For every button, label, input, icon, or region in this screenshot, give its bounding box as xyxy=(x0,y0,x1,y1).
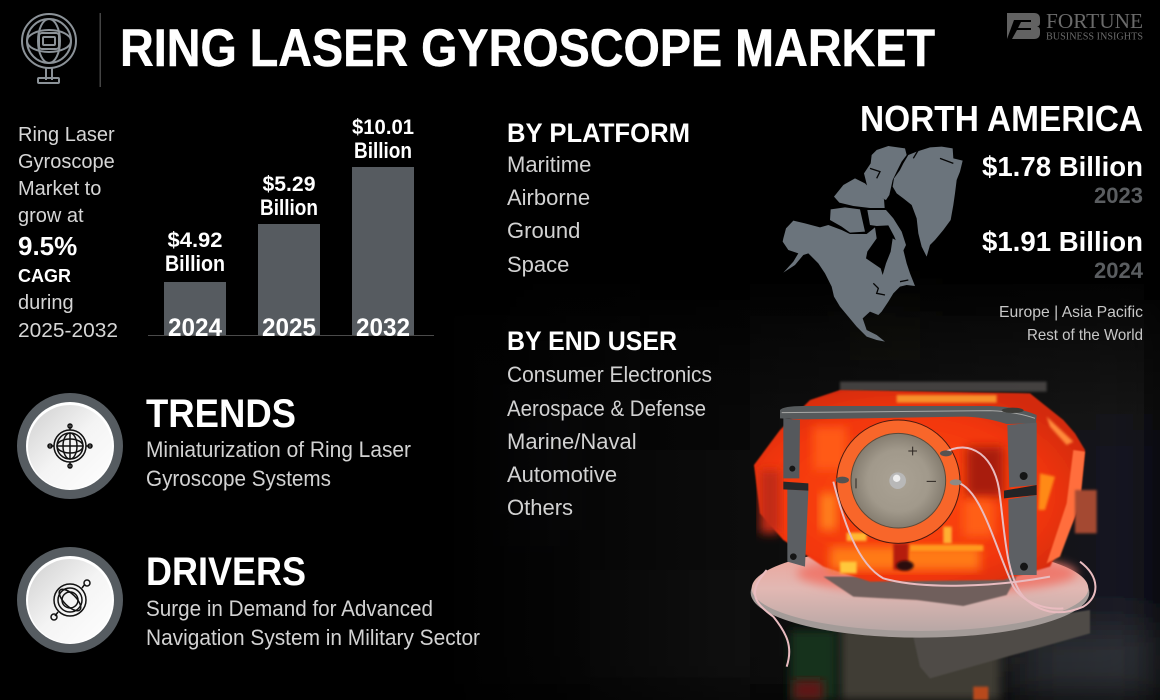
bar chart xyxy=(148,116,434,342)
trends text: Miniaturization of Ring Laser xyxy=(146,437,411,462)
photo: ring laser gyroscope device xyxy=(751,382,1097,700)
bar 2025 xyxy=(258,173,320,342)
bar 2024: $4.92 xyxy=(168,229,222,252)
bar 2024 xyxy=(164,229,226,342)
CAGR text block: 9.5% xyxy=(18,231,77,261)
bar 2025: Billion xyxy=(260,195,318,220)
map: North America xyxy=(783,146,963,342)
segment list: by end user: Automotive xyxy=(507,462,617,487)
CAGR text block: during xyxy=(18,292,74,314)
bar 2025: 2025 xyxy=(262,314,316,342)
photo: wires xyxy=(755,447,1095,667)
region value 2023 xyxy=(982,151,1143,208)
photo: solder joints xyxy=(836,450,962,485)
CAGR text block: 2025-2032 xyxy=(18,320,118,342)
segment list: by platform: Airborne xyxy=(507,185,590,210)
header divider xyxy=(100,13,101,87)
segment list: by end user xyxy=(507,326,712,520)
other regions: Europe | Asia Pacific xyxy=(999,304,1143,321)
segment list: by end user: Aerospace & Defense xyxy=(507,396,706,421)
region value 2023: $1.78 Billion xyxy=(982,151,1143,182)
bar 2025: $5.29 xyxy=(262,173,316,196)
drivers text: Surge in Demand for Advanced xyxy=(146,596,433,621)
drivers text xyxy=(146,596,480,650)
other regions xyxy=(999,304,1143,344)
trends heading: TRENDS xyxy=(146,392,296,436)
segment list: by end user: Consumer Electronics xyxy=(507,362,712,387)
CAGR text block: CAGR xyxy=(18,266,71,286)
brand logo xyxy=(1007,9,1143,42)
bar 2032: $10.01 xyxy=(352,116,414,139)
title: RING LASER GYROSCOPE MARKET xyxy=(120,19,935,78)
region value 2023: 2023 xyxy=(1094,183,1143,208)
trends text xyxy=(146,437,411,491)
CAGR text block: Gyroscope xyxy=(18,151,115,173)
drivers heading: DRIVERS xyxy=(146,550,306,594)
photo: glowing crystal block xyxy=(754,382,1097,582)
segment list: by end user: BY END USER xyxy=(507,326,677,356)
photo: ring and central disc xyxy=(837,420,960,543)
photo: metal frame xyxy=(780,406,1037,575)
segment list: by platform: Maritime xyxy=(507,152,591,177)
photo: round table xyxy=(751,546,1089,638)
trends panel xyxy=(17,392,411,499)
bar 2024: 2024 xyxy=(168,314,222,342)
CAGR text block: grow at xyxy=(18,205,84,227)
CAGR text block: Ring Laser xyxy=(18,124,115,146)
drivers panel xyxy=(17,547,480,653)
segment list: by platform: Ground xyxy=(507,218,580,243)
segment list: by platform: BY PLATFORM xyxy=(507,118,690,148)
region value 2024: 2024 xyxy=(1094,258,1144,283)
region heading: NORTH AMERICA xyxy=(860,98,1143,139)
brand logo: BUSINESS INSIGHTS xyxy=(1046,32,1143,42)
CAGR text block: Market to xyxy=(18,178,101,200)
region value 2024 xyxy=(982,226,1144,283)
bar 2032 xyxy=(352,116,414,342)
segment list: by platform: Space xyxy=(507,252,569,277)
photo: pedestal xyxy=(790,610,1090,700)
region value 2024: $1.91 Billion xyxy=(982,226,1143,257)
icon: drivers gyroscope button xyxy=(17,547,123,653)
segment list: by end user: Others xyxy=(507,495,573,520)
segment list: by end user: Marine/Naval xyxy=(507,429,637,454)
drivers text: Navigation System in Military Sector xyxy=(146,625,480,650)
segment list: by platform xyxy=(507,118,690,277)
bar 2024: Billion xyxy=(165,251,225,276)
CAGR text block xyxy=(18,124,118,342)
icon: trends globe button xyxy=(17,393,123,499)
bar 2032: 2032 xyxy=(356,314,410,342)
other regions: Rest of the World xyxy=(1027,327,1143,344)
brand logo: FORTUNE xyxy=(1046,9,1143,33)
icon: gyroscope logo xyxy=(22,14,76,83)
trends text: Gyroscope Systems xyxy=(146,466,331,491)
bar 2032: Billion xyxy=(354,138,412,163)
